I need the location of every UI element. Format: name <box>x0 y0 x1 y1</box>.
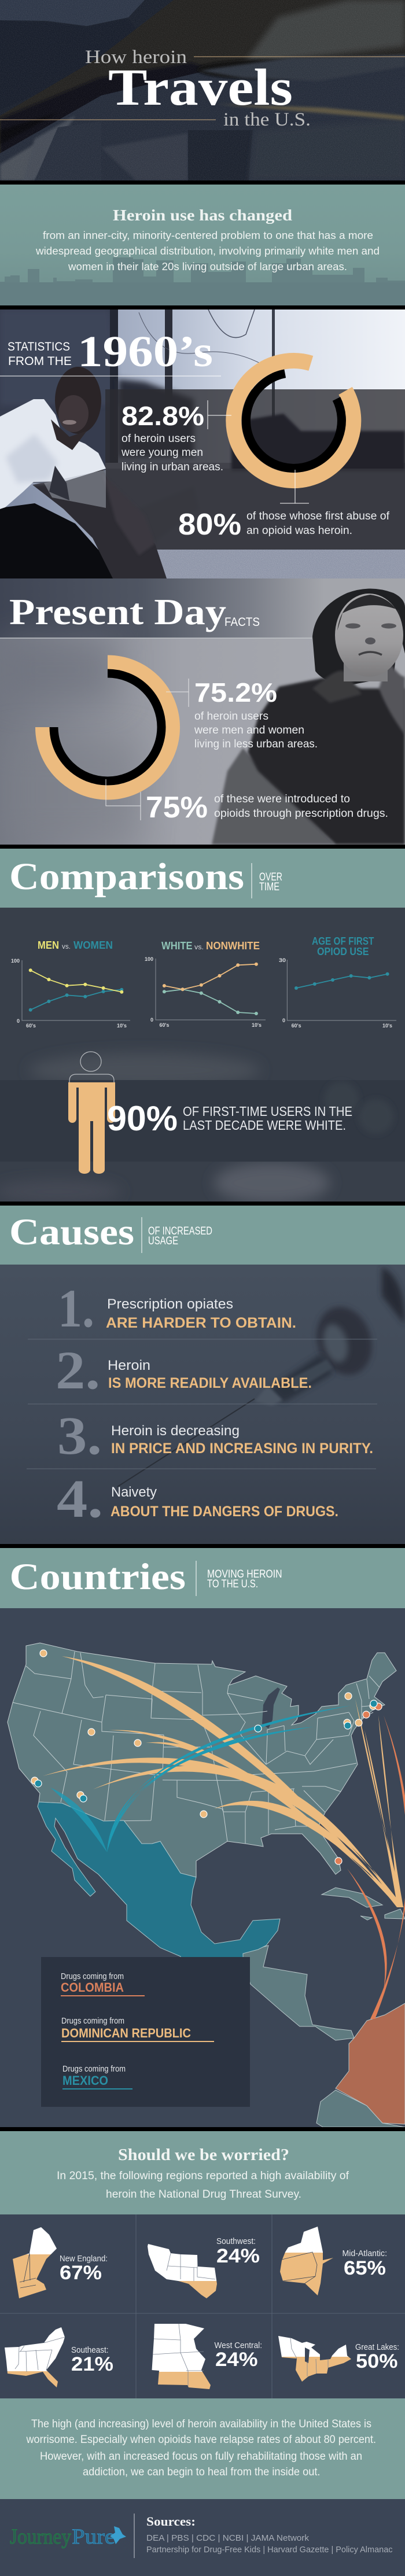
donut chart present day <box>42 662 172 793</box>
chart: white vs nonwhite: vs. <box>194 943 204 951</box>
syringe photo <box>117 1267 405 1487</box>
hero title rule bottom <box>0 119 216 120</box>
map: Mexico <box>38 1802 280 1967</box>
region: Mid-Atlantic <box>280 2227 387 2295</box>
region: Southwest: 24% <box>216 2245 260 2267</box>
region: West Central: West Central: <box>214 2341 262 2350</box>
sources: Sources: <box>146 2514 196 2529</box>
chart: men vs women: 100 <box>11 958 20 964</box>
heading: statistics from the: STATISTICS <box>8 340 70 353</box>
logo: JourneyPure <box>10 2525 126 2549</box>
smoky background <box>0 908 405 1204</box>
panel: should we be worried: In 2015, the following regions reported a high availability of <box>57 2170 349 2182</box>
dark overlay panel <box>105 389 405 550</box>
section header: comparisons: TIME <box>259 881 279 893</box>
cause 1: ARE HARDER TO OBTAIN. <box>106 1315 296 1331</box>
photo background <box>0 578 405 845</box>
stat: 90%: OF FIRST-TIME USERS IN THE <box>183 1104 352 1119</box>
section header: comparisons: OVER <box>259 871 282 883</box>
panel: footer <box>0 2499 405 2576</box>
panel: closing paragraph: worrisome. Especially when opioids have relapse rates of about 80 percent. <box>26 2434 376 2446</box>
panel: should we be worried: heroin the National Drug Threat Survey. <box>106 2188 301 2201</box>
stat: 82.8%: were young men <box>121 447 203 459</box>
section header: comparisons: Comparisons <box>9 856 244 898</box>
cause 3: 3. <box>57 1406 102 1466</box>
region: Southeast: Southeast: <box>71 2345 109 2355</box>
cause 2: IS MORE READILY AVAILABLE. <box>108 1375 312 1391</box>
stat: 75%: opioids through prescription drugs. <box>214 808 388 820</box>
region: Great Lakes: 50% <box>356 2350 398 2372</box>
cause 2: 2. <box>56 1341 100 1401</box>
region: Southwest: Southwest: <box>216 2236 256 2246</box>
panel: closing paragraph: However, with an increased focus on fully rehabilitating those with an <box>40 2450 362 2463</box>
chart: men vs women: 0 <box>17 1018 20 1024</box>
stat: 82.8% <box>121 401 223 473</box>
man photo <box>0 367 167 578</box>
stat: 90%: 90% <box>107 1099 178 1138</box>
region: Southwest <box>148 2236 260 2298</box>
cause 3 <box>57 1406 373 1466</box>
hero background road photo <box>0 0 405 180</box>
intro text <box>35 230 380 272</box>
heading: How heroin: How heroin <box>85 47 187 68</box>
cause 3: IN PRICE AND INCREASING IN PURITY. <box>111 1440 373 1457</box>
heading rule <box>0 637 312 639</box>
intro text: from an inner-city, minority-centered problem to one that has a more <box>43 230 373 241</box>
section header: causes <box>0 1206 405 1265</box>
heading: 1960's: 1960’s <box>78 327 213 376</box>
heading: in the U.S.: in the U.S. <box>223 109 311 130</box>
cause 1: Prescription opiates <box>107 1296 233 1312</box>
chart: white vs nonwhite: 0 <box>150 1017 153 1023</box>
stat: 80%: 80% <box>178 508 241 541</box>
skyline silhouette <box>0 257 405 282</box>
stat: 75.2%: were men and women <box>194 724 304 736</box>
panel: trafficking map <box>0 1608 405 2127</box>
panel: closing paragraph: addiction, we can begin to heal from the inside out. <box>83 2466 321 2478</box>
stat: 82.8%: of heroin users <box>122 433 196 445</box>
heading: statistics from the <box>8 342 72 365</box>
intro text: widespread geographical distribution, involving primarily white men and <box>35 245 380 257</box>
map: city dots <box>31 1650 382 1864</box>
stat: 80% <box>179 511 390 536</box>
icon: person 90 percent filled <box>68 1052 115 1174</box>
heading rule <box>0 376 221 377</box>
section header: causes: USAGE <box>148 1235 178 1247</box>
chart: white vs nonwhite: 60's <box>160 1022 169 1028</box>
connector to 75.2% <box>166 679 189 707</box>
region: Mid-Atlantic: 65% <box>344 2257 386 2279</box>
chart: age of first opioid use <box>279 935 396 1029</box>
chart: white vs nonwhite: WHITE <box>161 940 193 952</box>
region: Great Lakes: Great Lakes: <box>355 2342 399 2352</box>
route arcs: Colombia <box>347 1715 405 2019</box>
chart: age of first opioid use: AGE OF FIRST <box>312 935 374 947</box>
stat: 90%: LAST DECADE WERE WHITE. <box>183 1118 346 1133</box>
chart: age of first opioid use: OPIOD USE <box>317 946 369 957</box>
legend panel: COLOMBIA <box>61 1980 124 1995</box>
chart: men vs women <box>11 939 130 1029</box>
heading: Travels: Travels <box>108 59 293 116</box>
panel: should we be worried: Should we be worried? <box>118 2146 289 2164</box>
stat: 75.2%: 75.2% <box>194 677 277 707</box>
section header: countries <box>0 1548 405 1608</box>
stat: 82.8%: living in urban areas. <box>122 461 223 473</box>
cause 4 <box>57 1469 338 1529</box>
heading: statistics from the: FROM THE <box>8 355 72 368</box>
section header: causes: OF INCREASED <box>148 1225 212 1237</box>
region: New England <box>13 2227 108 2298</box>
connector to 75% <box>106 779 141 820</box>
cause 1: 1. <box>58 1279 94 1339</box>
chart: men vs women: MEN <box>38 939 59 951</box>
map: Central and South America land <box>240 1888 405 2127</box>
heading: Heroin use has changed: Heroin use has changed <box>113 207 292 224</box>
chart: men vs women: 60's <box>26 1023 36 1029</box>
region: New England: 67% <box>60 2262 102 2284</box>
panel: comparisons charts <box>0 908 405 1204</box>
section header: causes: Causes <box>9 1211 134 1253</box>
region: Southeast <box>5 2327 113 2387</box>
photo background <box>0 309 405 578</box>
chart: men vs women: vs. <box>62 942 71 950</box>
region: Great Lakes <box>278 2336 399 2382</box>
stat: 75%: of these were introduced to <box>214 793 350 805</box>
panel: heroin use has changed <box>0 185 405 305</box>
heading: facts: FACTS <box>224 616 260 629</box>
panel: should we be worried <box>0 2131 405 2214</box>
cause 1 <box>58 1279 296 1339</box>
chart: age of first opioid use: 60's <box>292 1023 301 1029</box>
chart: white vs nonwhite <box>145 940 266 1028</box>
stat: 75.2%: of heroin users <box>194 710 268 723</box>
connector to 82.8% <box>208 400 231 429</box>
map: United States <box>8 1643 396 1877</box>
stat: 80%: an opioid was heroin. <box>246 525 352 537</box>
stat: 75.2% <box>194 677 318 750</box>
section header: countries: Countries <box>9 1556 186 1598</box>
stat: 75%: 75% <box>146 791 208 824</box>
section header: countries: TO THE U.S. <box>207 1578 258 1590</box>
panel: closing paragraph <box>0 2398 405 2499</box>
chart: men vs women: WOMEN <box>73 939 113 951</box>
woman photo <box>212 589 405 845</box>
connector to 80% <box>280 470 309 503</box>
legend panel: MEXICO <box>62 2073 108 2088</box>
panel: statistics from the 1960s <box>0 309 405 578</box>
chart: age of first opioid use: 0 <box>282 1018 285 1023</box>
chart: white vs nonwhite: NONWHITE <box>206 940 260 952</box>
panel: present day facts <box>0 578 405 845</box>
cause 4: ABOUT THE DANGERS OF DRUGS. <box>111 1503 338 1520</box>
legend panel: DOMINICAN REPUBLIC <box>61 2026 191 2040</box>
legend panel: Drugs coming from <box>61 1971 124 1981</box>
heading: Present Day: Present Day <box>9 591 226 632</box>
stat: 75% <box>147 794 388 819</box>
legend panel: Drugs coming from <box>62 2064 126 2074</box>
logo: JourneyPure: Journey <box>10 2525 71 2549</box>
region: West Central <box>152 2324 262 2389</box>
chart: age of first opioid use: 30 <box>279 957 286 963</box>
region: Mid-Atlantic: Mid-Atlantic: <box>343 2249 387 2258</box>
route arcs: Mexico <box>50 1705 351 1852</box>
logo: JourneyPure: Pure <box>72 2525 115 2549</box>
sources <box>146 2514 393 2555</box>
chart: white vs nonwhite: 10's <box>252 1022 262 1028</box>
intro text: women in their late 20s living outside of large urban areas. <box>68 261 347 272</box>
chart: white vs nonwhite: 100 <box>145 956 153 962</box>
stat: 90% <box>107 1099 352 1138</box>
donut chart 1960s <box>234 361 354 481</box>
route arcs: Dominican Republic <box>43 1656 404 1907</box>
chart: men vs women: 10's <box>117 1023 127 1029</box>
region: New England: New England: <box>60 2254 108 2264</box>
panel: causes list <box>0 1265 405 1544</box>
cause 4: 4. <box>57 1469 103 1529</box>
stat: 82.8%: 82.8% <box>122 401 204 431</box>
legend panel <box>41 1957 250 2107</box>
chart: age of first opioid use: 10's <box>382 1023 392 1029</box>
stat: 75.2%: living in less urban areas. <box>194 738 318 750</box>
panel: hero <box>0 0 405 180</box>
cause 2 <box>56 1341 312 1401</box>
legend panel: Drugs coming from <box>61 2016 124 2026</box>
region: Southeast: 21% <box>71 2353 113 2375</box>
cause 2: Heroin <box>108 1358 150 1373</box>
sources: Partnership for Drug-Free Kids | Harvard Gazette | Policy Almanac <box>146 2545 393 2555</box>
section header: comparisons <box>0 849 405 908</box>
section header: countries: MOVING HEROIN <box>207 1568 282 1580</box>
region: West Central: 24% <box>215 2349 258 2371</box>
stat: 80%: of those whose first abuse of <box>246 510 390 522</box>
cause 3: Heroin is decreasing <box>111 1423 240 1439</box>
panel: regional availability grid <box>0 2214 405 2398</box>
panel: closing paragraph: The high (and increasing) level of heroin availability in the United States is <box>31 2418 371 2430</box>
sources: DEA | PBS | CDC | NCBI | JAMA Network <box>146 2533 310 2543</box>
cause 4: Naivety <box>111 1484 157 1500</box>
